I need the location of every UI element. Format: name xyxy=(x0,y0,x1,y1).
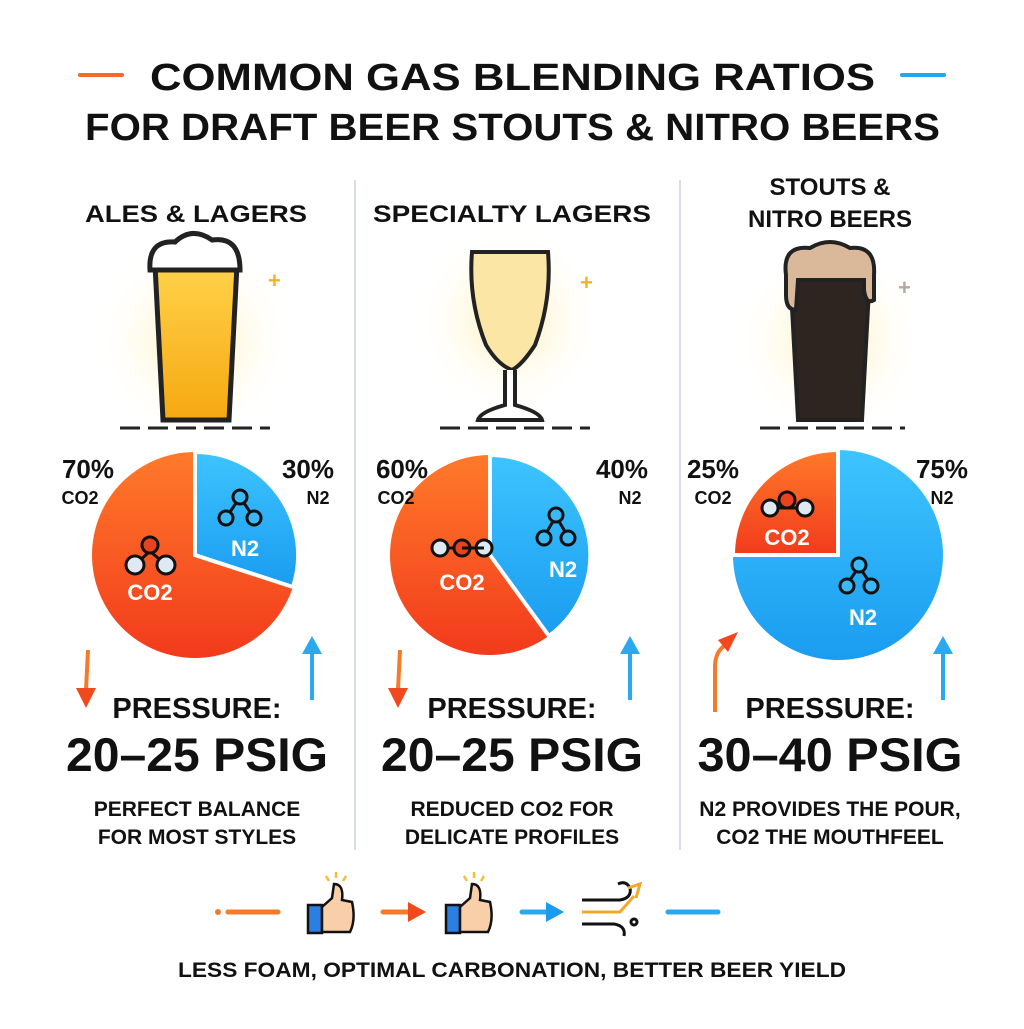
pie chart: 60/40: CO2 xyxy=(439,570,485,595)
title: COMMON GAS BLENDING RATIOS xyxy=(150,57,875,99)
icon: tulip glass xyxy=(415,225,605,428)
label: 40% N2: N2 xyxy=(618,488,642,508)
label: 60% CO2: CO2 xyxy=(377,488,415,508)
description: N2 PROVIDES THE POUR, xyxy=(699,798,961,821)
description: PERFECT BALANCE xyxy=(94,798,300,821)
icon: tulip glass: + xyxy=(580,270,593,295)
description: FOR MOST STYLES xyxy=(98,826,296,849)
icon: pint glass xyxy=(95,233,295,440)
label: 75% N2: 75% xyxy=(916,454,968,484)
panel: ales & lagers xyxy=(61,201,334,849)
pie chart: 25/75: CO2 xyxy=(764,525,810,550)
description: DELICATE PROFILES xyxy=(405,826,619,849)
footer text: LESS FOAM, OPTIMAL CARBONATION, BETTER BEER YIELD xyxy=(178,959,846,982)
icon: thumbs up 1 xyxy=(308,872,354,933)
arrow: red xyxy=(383,902,426,922)
icon: thumbs up 2 xyxy=(446,872,492,933)
pressure text: PRESSURE: xyxy=(427,693,597,725)
description: CO2 THE MOUTHFEEL xyxy=(716,826,944,849)
icon: stout glass: + xyxy=(898,275,911,300)
panel: specialty lagers xyxy=(373,201,651,849)
label: 30% N2: 30% xyxy=(282,454,334,484)
label: 70% CO2: 70% xyxy=(62,454,114,484)
title xyxy=(80,57,944,149)
benefits row xyxy=(215,872,718,936)
arrows xyxy=(715,632,953,712)
pie chart: 70/30: N2 xyxy=(231,536,259,561)
pressure text: PRESSURE: xyxy=(745,693,915,725)
heading: ales: ALES & LAGERS xyxy=(85,201,307,228)
pie chart: 25/75: N2 xyxy=(849,605,877,630)
panel: stouts & nitro: 30–40 PSIG xyxy=(698,728,962,781)
icon: pint glass: + xyxy=(268,268,281,293)
arrows xyxy=(76,636,322,708)
description: REDUCED CO2 FOR xyxy=(410,798,614,821)
pie chart: 60/40 xyxy=(390,455,590,655)
label: 75% N2: N2 xyxy=(930,488,954,508)
arrows xyxy=(388,636,640,708)
label: 25% CO2: 25% xyxy=(687,454,739,484)
label: 25% CO2: CO2 xyxy=(694,488,732,508)
heading: stouts: NITRO BEERS xyxy=(748,206,912,233)
pressure text: PRESSURE: xyxy=(112,693,282,725)
pie chart: 25/75 xyxy=(733,450,943,660)
panel: stouts & nitro xyxy=(687,174,968,849)
panel: ales & lagers: 20–25 PSIG xyxy=(66,728,328,781)
title: FOR DRAFT BEER STOUTS & NITRO BEERS xyxy=(85,107,940,149)
label: 40% N2: 40% xyxy=(596,454,648,484)
arrow: blue xyxy=(522,902,564,922)
heading: stouts: STOUTS & xyxy=(770,174,890,201)
panel: specialty lagers: 20–25 PSIG xyxy=(381,728,643,781)
icon: airflow xyxy=(582,883,640,936)
label: 70% CO2: CO2 xyxy=(61,488,99,508)
pie chart: 60/40: N2 xyxy=(549,557,577,582)
pie chart: 70/30: CO2 xyxy=(127,580,173,605)
pie chart: 70/30 xyxy=(92,452,298,658)
icon: stout glass xyxy=(735,242,925,435)
label: 60% CO2: 60% xyxy=(376,454,428,484)
label: 30% N2: N2 xyxy=(306,488,330,508)
heading: specialty: SPECIALTY LAGERS xyxy=(373,201,651,228)
